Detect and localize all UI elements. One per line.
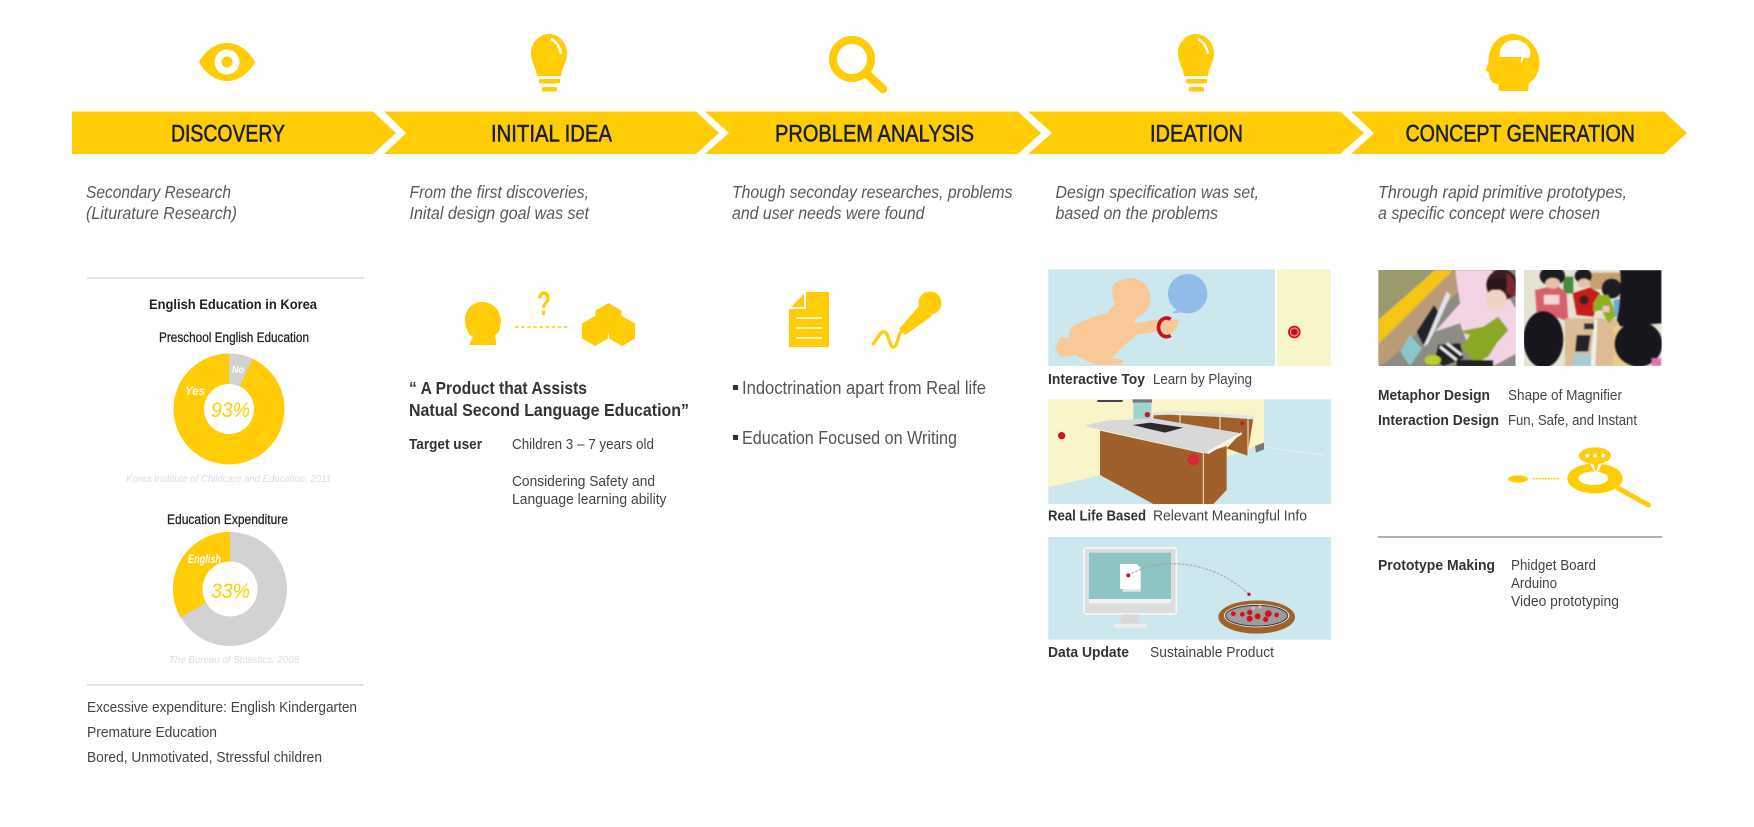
- bullet list: problems: [733, 378, 986, 448]
- panel: english education in korea: [87, 278, 364, 766]
- text: design specification: Shape of Magnifier: [1508, 387, 1622, 404]
- subtitle: ideation: Design specification was set,: [1056, 182, 1259, 202]
- subtitle: problem analysis: and user needs were found: [732, 203, 926, 223]
- caption: interactive toy: [1048, 371, 1252, 388]
- illustration: interactive toy: [1048, 269, 1331, 366]
- illustration: data update: [1048, 537, 1331, 640]
- arrow: discovery: [72, 112, 396, 154]
- text: prototype making: Prototype Making: [1378, 557, 1495, 574]
- subtitle: ideation: [1056, 182, 1259, 223]
- text: target user: [409, 436, 667, 508]
- source: korea institute: Korea Institute of Childcare and Education, 2011: [126, 473, 331, 485]
- subtitle: ideation: based on the problems: [1056, 203, 1218, 223]
- text: prototype making: [1378, 557, 1619, 610]
- findings list: Excessive expenditure: English Kindergarten: [87, 699, 357, 716]
- subtitle: concept generation: a specific concept were chosen: [1378, 203, 1600, 223]
- photo: child playing with prototype: [1378, 269, 1517, 367]
- arrow: concept generation: [1351, 112, 1687, 154]
- heading: english education in korea: English Education in Korea: [149, 297, 317, 312]
- arrow: ideation: IDEATION: [1150, 120, 1243, 148]
- icon: eye: [199, 43, 255, 81]
- findings list: [87, 699, 357, 766]
- process arrow banner: [72, 112, 1687, 154]
- donut chart: education expenditure: English: [188, 554, 221, 566]
- icon: magnifier concept with speech bubble: [1508, 447, 1648, 505]
- caption: real life based: Relevant Meaningful Info: [1153, 508, 1307, 524]
- text: prototype making: Arduino: [1511, 575, 1557, 592]
- subtitle: initial idea: [410, 182, 590, 223]
- findings list: Premature Education: [87, 724, 217, 741]
- arrow: problem analysis: [705, 112, 1041, 154]
- text: prototype making: Phidget Board: [1511, 557, 1596, 574]
- illustration: kitchen counter: [1048, 399, 1331, 504]
- text: design goal quote: “ A Product that Assists: [409, 378, 587, 398]
- subtitle: initial idea: From the first discoveries,: [410, 182, 589, 202]
- donut chart: preschool english education: No: [232, 364, 244, 376]
- donut chart: preschool english education: 93%: [211, 399, 250, 422]
- text: design specification: Fun, Safe, and Instant: [1508, 412, 1638, 429]
- subtitle: concept generation: [1378, 182, 1627, 223]
- icon: child, question and product: ?: [537, 285, 551, 323]
- text: design goal quote: Natual Second Language Education”: [409, 400, 689, 420]
- donut chart: education expenditure: [173, 532, 287, 646]
- chart title: preschool: Preschool English Education: [159, 330, 309, 345]
- caption: interactive toy: Interactive Toy: [1048, 371, 1146, 388]
- text: target user: Children 3 – 7 years old: [512, 436, 654, 453]
- icon: magnifier: [833, 40, 883, 89]
- icon: head with brain: [1486, 34, 1540, 91]
- source: bureau of statistics: The Bureau of Statistics, 2008: [169, 654, 299, 666]
- icon: microphone: [873, 292, 942, 347]
- subtitle: problem analysis: [732, 182, 1013, 223]
- caption: real life based: Real Life Based: [1048, 508, 1146, 524]
- donut chart: preschool english education: [174, 353, 284, 464]
- subtitle: discovery: (Liturature Research): [86, 203, 237, 223]
- subtitle: discovery: [86, 182, 237, 223]
- caption: data update: Data Update: [1048, 644, 1129, 661]
- bullet list: problems: Education Focused on Writing: [742, 428, 957, 448]
- donut chart: education expenditure: 33%: [211, 580, 250, 603]
- icon: light bulb (initial idea): [531, 34, 567, 92]
- icon: light bulb (ideation): [1178, 34, 1214, 92]
- icon: child, question and product: [465, 285, 635, 346]
- arrow: concept generation: CONCEPT GENERATION: [1406, 120, 1635, 148]
- bullet list: problems: Indoctrination apart from Real life: [742, 378, 986, 398]
- text: design specification: Metaphor Design: [1378, 387, 1490, 404]
- photo: children around prototype: [1523, 266, 1662, 368]
- subtitle: concept generation: Through rapid primitive prototypes,: [1378, 182, 1627, 202]
- subtitle: initial idea: Inital design goal was set: [410, 203, 590, 223]
- text: prototype making: Video prototyping: [1511, 593, 1619, 610]
- subtitle: problem analysis: Though seconday researches, problems: [732, 182, 1013, 202]
- subtitle: discovery: Secondary Research: [86, 182, 231, 202]
- caption: real life based: [1048, 508, 1307, 524]
- text: target user: Target user: [409, 436, 482, 453]
- text: design specification: Interaction Design: [1378, 412, 1499, 429]
- caption: interactive toy: Learn by Playing: [1153, 371, 1252, 388]
- arrow: initial idea: INITIAL IDEA: [491, 120, 612, 148]
- text: target user: Language learning ability: [512, 491, 667, 508]
- caption: data update: Sustainable Product: [1150, 644, 1275, 661]
- arrow: initial idea: [384, 112, 719, 154]
- donut chart: preschool english education: Yes: [185, 386, 205, 398]
- findings list: Bored, Unmotivated, Stressful children: [87, 749, 322, 766]
- arrow: discovery: DISCOVERY: [171, 120, 285, 148]
- icon: document: [789, 292, 829, 347]
- text: target user: Considering Safety and: [512, 473, 655, 490]
- caption: data update: [1048, 644, 1275, 661]
- text: design specification: [1378, 387, 1638, 429]
- arrow: ideation: [1028, 112, 1364, 154]
- chart title: expenditure: Education Expenditure: [167, 512, 288, 527]
- arrow: problem analysis: PROBLEM ANALYSIS: [775, 120, 974, 148]
- text: design goal quote: [409, 378, 689, 420]
